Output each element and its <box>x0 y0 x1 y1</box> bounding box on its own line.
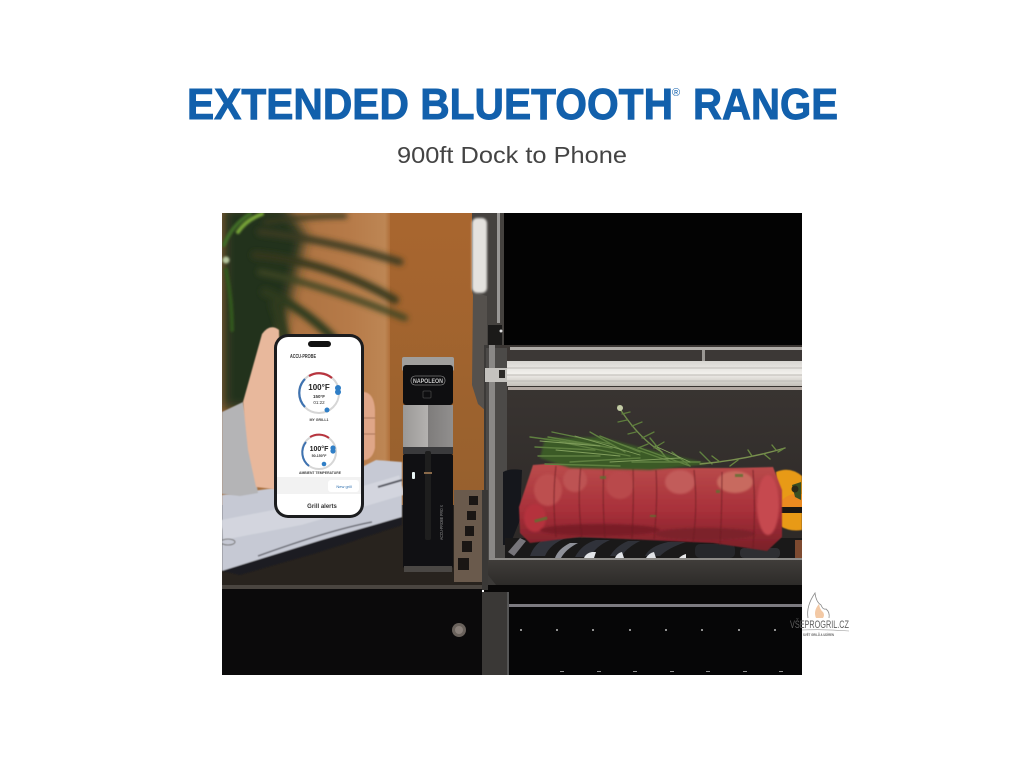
plant leaves <box>222 214 262 330</box>
plant fronds <box>255 216 405 355</box>
grill interior <box>507 345 802 538</box>
grill lid <box>472 213 802 412</box>
new grill button <box>328 480 359 492</box>
plant shadow <box>222 205 305 410</box>
probe dock <box>402 357 454 572</box>
brand tagline: SVĚT GRILŮ A UDÍREN <box>803 632 834 637</box>
photo: grill scene <box>221 205 802 675</box>
upper temperature gauge <box>299 373 341 413</box>
grill front lip <box>484 558 802 605</box>
lower temperature gauge <box>302 435 336 469</box>
brand underline <box>802 630 849 631</box>
grate <box>505 538 802 558</box>
ambient label: AMBIENT TEMPERATURE <box>299 471 342 475</box>
subtitle: 900ft Dock to Phone <box>397 142 627 168</box>
wood wall <box>222 213 490 513</box>
sleeve <box>222 402 258 496</box>
right stem <box>700 445 785 466</box>
settings band <box>277 477 361 494</box>
meat roast <box>519 462 782 551</box>
brand name: VŠEPROGRIL.CZ <box>790 618 849 631</box>
dock label: ACCU-PROBE PRO X <box>439 505 444 540</box>
upper temperature gauge: 01:22 <box>313 400 325 405</box>
upper temperature gauge: 100°F <box>308 383 330 392</box>
hand <box>243 327 375 490</box>
grill alerts: Grill alerts <box>307 504 338 510</box>
app header: ACCU-PROBE <box>290 354 317 360</box>
pepper behind meat <box>776 470 802 530</box>
registered mark: ® <box>672 87 680 99</box>
grill side frame <box>485 345 522 563</box>
lower temperature gauge: 50-150°F <box>312 454 327 458</box>
probe details: MY GRILL1 <box>309 418 329 422</box>
dock logo: NAPOLEON <box>413 379 443 385</box>
title: EXTENDED BLUETOOTH <box>187 80 673 129</box>
grill cabinet <box>481 592 802 675</box>
phone <box>274 334 364 518</box>
rosemary sprig <box>530 405 785 470</box>
grill base backing <box>484 345 500 585</box>
dock logo <box>411 376 445 385</box>
upper temperature gauge: 150°F <box>313 394 325 399</box>
warming rack <box>506 347 802 390</box>
title end word: RANGE <box>693 80 838 129</box>
phone notch <box>308 341 331 347</box>
upright stem <box>617 405 664 452</box>
side table <box>222 490 488 675</box>
watermark logo <box>790 593 849 637</box>
new grill button: New grill <box>336 484 352 489</box>
towel <box>221 460 402 575</box>
flame icon <box>808 593 829 618</box>
lower temperature gauge: 100°F <box>310 445 329 453</box>
